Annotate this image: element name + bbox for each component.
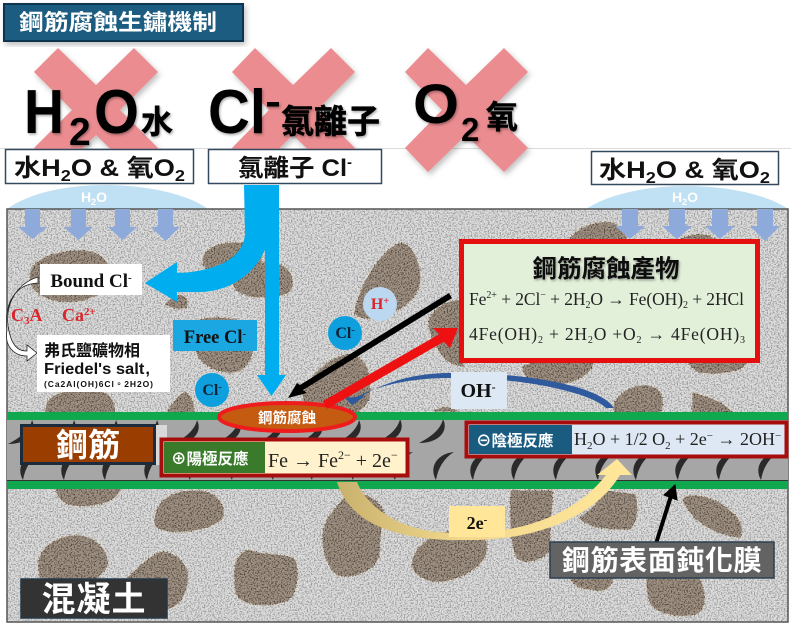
- label: water and oxygen right: 2: [760, 170, 770, 187]
- label: water and oxygen right: 水H: [599, 157, 640, 184]
- water cloud left: 2: [91, 197, 96, 207]
- text: C3A: A: [30, 305, 42, 325]
- ion: chloride right: -: [351, 325, 355, 336]
- big label: oxygen: 2: [461, 111, 479, 148]
- label: Friedel's salt: [37, 335, 170, 392]
- label: concrete: [21, 579, 167, 619]
- ion: hydrogen: H: [371, 296, 383, 313]
- label: water and oxygen left: O & 氧O: [71, 155, 175, 182]
- ion: hydrogen: [363, 287, 397, 321]
- big label: water: [24, 78, 173, 154]
- big label: water: 2: [69, 111, 91, 154]
- cathode reaction: + 2e: [671, 429, 707, 449]
- panel: corrosion products: 2: [683, 300, 688, 311]
- cathode reaction: 2: [587, 440, 592, 452]
- label: water and oxygen right: [592, 152, 778, 187]
- label: concrete: 混凝土: [42, 581, 146, 619]
- ion: chloride right: Cl: [335, 325, 351, 342]
- label: 2e-: -: [484, 514, 488, 526]
- water cloud left: H: [81, 189, 91, 205]
- big label: chloride: [208, 78, 380, 147]
- panel: corrosion products: 2+: [486, 290, 497, 301]
- aggregates: [29, 222, 748, 616]
- panel: corrosion products: Fe: [469, 289, 486, 309]
- panel: corrosion products: + 2H: [544, 324, 587, 344]
- ion: chloride lower: [195, 373, 229, 407]
- label: free chloride: [173, 320, 257, 351]
- label: bound chloride: [40, 264, 142, 295]
- corrosion spot: [218, 402, 358, 431]
- anode reaction: Fe → Fe: [268, 450, 338, 472]
- label: water and oxygen left: 2: [61, 168, 71, 185]
- label: water and oxygen left: 2: [175, 168, 185, 185]
- big label: oxygen: O: [413, 72, 459, 135]
- anode reaction: 2−: [338, 448, 351, 462]
- black arrow to corrosion: [288, 293, 452, 398]
- text: C3A: 3: [24, 315, 30, 327]
- rebar: [7, 412, 788, 489]
- ion: hydrogen: +: [383, 296, 389, 307]
- cathode reaction: [466, 422, 786, 456]
- water cloud right: 2: [682, 197, 687, 207]
- label: Friedel's salt: (Ca2Al(OH)6Cl。2H2O): [44, 379, 153, 389]
- panel: corrosion products: −: [540, 290, 546, 301]
- label: rebar: [22, 425, 167, 465]
- label: free chloride: -: [243, 328, 247, 340]
- panel: corrosion products: 鋼筋腐蝕產物: [532, 255, 680, 283]
- big label: chloride: 氯離子: [281, 103, 380, 140]
- label: bound chloride: -: [128, 272, 132, 284]
- red cross: water: [34, 48, 158, 172]
- curved arrow to Friedel's salt: [6, 277, 38, 361]
- red cross: oxygen: [405, 48, 528, 172]
- cathode reaction: −: [707, 430, 713, 442]
- label: water and oxygen right: O & 氧O: [656, 157, 760, 184]
- panel: corrosion products: + 2H: [546, 289, 586, 309]
- ion: chloride right: [328, 316, 362, 350]
- panel: corrosion products: → 4Fe(OH): [642, 324, 739, 344]
- label: bound chloride: Bound Cl: [50, 271, 128, 292]
- label: 2e-: 2e: [467, 513, 484, 533]
- concrete: [7, 209, 788, 622]
- panel: corrosion products: 2: [588, 335, 593, 346]
- label: free chloride: Free Cl: [184, 328, 243, 348]
- text: C3A: C: [11, 305, 24, 325]
- label: rebar: 鋼筋: [56, 427, 120, 463]
- label: OH-: -: [492, 380, 496, 394]
- panel: corrosion products: 4Fe(OH): [469, 324, 537, 344]
- cathode reaction: → 2OH: [713, 429, 775, 449]
- hydroxide arrow: [345, 373, 614, 408]
- anode reaction: −: [391, 448, 398, 462]
- label: chloride ion: -: [347, 154, 352, 170]
- label: passive film: 鋼筋表面鈍化膜: [562, 545, 762, 576]
- downward water arrows left: [18, 209, 180, 241]
- label: 2e-: [449, 506, 505, 537]
- water cloud left: [7, 185, 208, 209]
- anode reaction: + 2e: [351, 450, 391, 472]
- panel: corrosion products: O +O: [594, 324, 636, 344]
- label: OH-: OH: [460, 380, 492, 402]
- label: Friedel's salt: Friedel's salt ,: [44, 361, 150, 378]
- panel: corrosion products: 3: [740, 335, 745, 346]
- big label: water: H: [24, 78, 64, 147]
- downward water arrows right: [615, 209, 780, 241]
- panel: corrosion products: 2: [585, 300, 590, 311]
- label: chloride ion: [208, 150, 382, 184]
- label: water and oxygen left: [6, 150, 194, 185]
- anode reaction: ⊕陽極反應: [171, 449, 249, 468]
- black arrow to passive film: [655, 485, 677, 542]
- title: 鋼筋腐蝕生鏽機制: [19, 10, 217, 35]
- text: Ca2+: Ca: [62, 305, 84, 325]
- water cloud left: O: [96, 189, 107, 205]
- ion: chloride lower: -: [218, 382, 222, 393]
- red cross: chloride: [232, 48, 355, 172]
- panel: corrosion products: O → Fe(OH): [590, 289, 683, 309]
- big label: oxygen: 氧: [486, 99, 518, 135]
- panel: corrosion products: 2: [637, 335, 642, 346]
- cathode reaction: −: [775, 430, 781, 442]
- anode reaction: [162, 440, 408, 476]
- chloride arrow with bound and free branches: [145, 185, 286, 396]
- big label: water: O: [94, 78, 139, 147]
- big label: oxygen: [413, 72, 518, 148]
- big label: chloride: Cl: [208, 78, 266, 147]
- ribs: [8, 419, 779, 480]
- panel: corrosion products: + 2Cl: [497, 289, 541, 309]
- ion: chloride lower: Cl: [202, 382, 218, 399]
- panel: corrosion products: [462, 242, 758, 360]
- panel: corrosion products: 2: [538, 335, 543, 346]
- corrosion spot: 鋼筋腐蝕: [258, 409, 316, 427]
- water cloud right: [586, 186, 788, 209]
- cathode reaction: O + 1/2 O: [592, 429, 665, 449]
- text: Ca2+: 2+: [84, 306, 96, 318]
- label: water and oxygen left: 水H: [14, 155, 55, 182]
- big label: water: 水: [141, 104, 173, 140]
- label: chloride ion: 氯離子 Cl: [238, 155, 341, 182]
- electron flow arrow: [337, 459, 632, 540]
- label: Friedel's salt: 弗氏鹽礦物相: [44, 341, 140, 360]
- cathode reaction: H: [574, 429, 587, 449]
- water cloud right: H: [672, 189, 682, 205]
- label: OH-: [451, 372, 507, 409]
- header line: [0, 148, 791, 150]
- label: water and oxygen right: 2: [646, 170, 656, 187]
- panel: corrosion products: + 2HCl: [688, 289, 744, 309]
- cathode reaction: ⊖陰極反應: [476, 431, 554, 450]
- cathode reaction: 2: [665, 440, 671, 452]
- title: [4, 4, 243, 41]
- water cloud right: O: [687, 189, 698, 205]
- red arrow to products: [323, 328, 458, 409]
